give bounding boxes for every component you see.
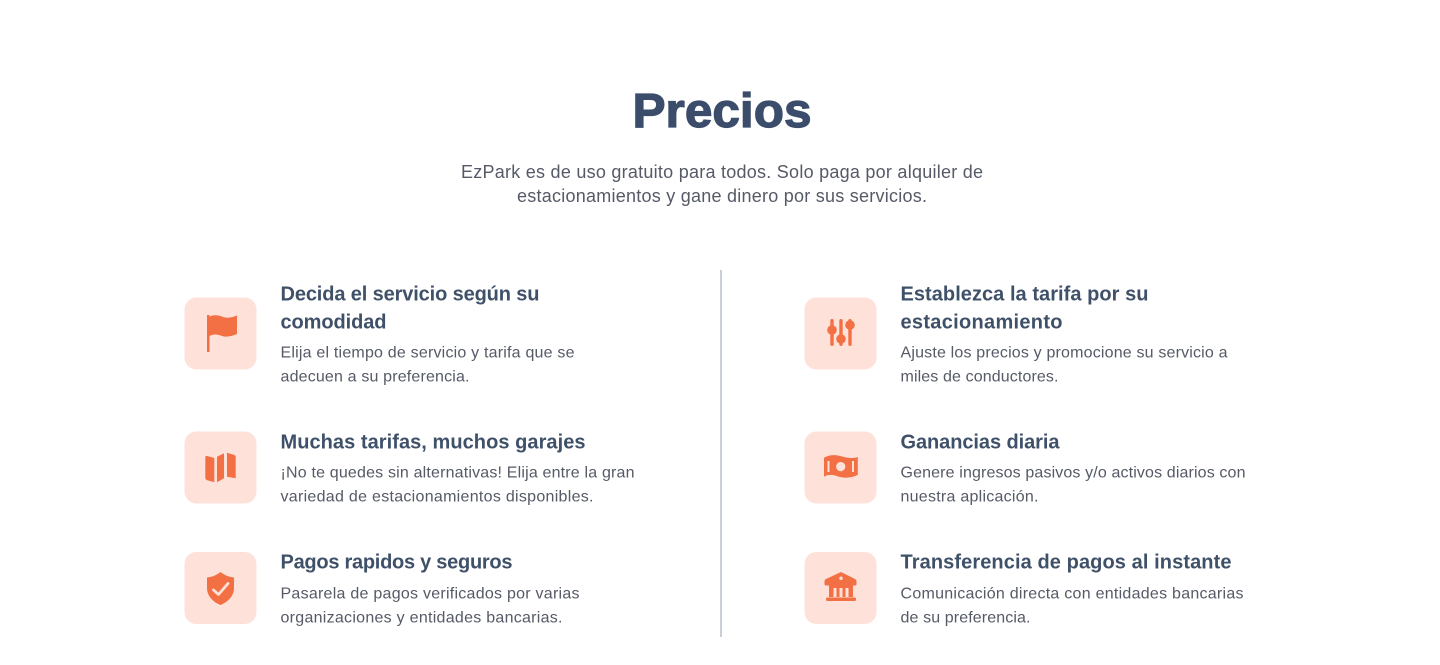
subtitle: EzPark es de uso gratuito para todos. Solo paga por alquiler de (461, 162, 983, 182)
subtitle: estacionamientos y gane dinero por sus servicios. (517, 186, 927, 206)
heading: comodidad (280, 312, 386, 334)
description: nuestra aplicación. (900, 488, 1038, 506)
description (900, 344, 1228, 386)
panel: establezca la tarifa (804, 284, 1228, 386)
description (280, 344, 575, 386)
panel: ganancias diaria (804, 432, 1246, 506)
icon: map (184, 432, 256, 504)
heading: Transferencia de pagos al instante (900, 552, 1232, 574)
heading (280, 284, 540, 334)
description: Pasarela de pagos verificados por varias (280, 586, 580, 602)
heading: Ganancias diaria (900, 432, 1060, 454)
description: Comunicación directa con entidades bancarias (900, 586, 1244, 602)
panel: decida el servicio (184, 284, 575, 386)
icon: bank (804, 552, 876, 624)
description: ¡No te quedes sin alternativas! Elija entre la gran (280, 464, 634, 482)
icon: banknote (804, 432, 876, 504)
icon: sliders (804, 298, 876, 370)
description (900, 464, 1246, 506)
description: miles de conductores. (900, 368, 1058, 386)
description: Genere ingresos pasivos y/o activos diarios con (900, 464, 1246, 482)
description (280, 464, 634, 506)
description: adecuen a su preferencia. (280, 368, 470, 386)
title: Precios (632, 85, 812, 138)
heading (900, 284, 1148, 334)
panel: transferencia de pagos (804, 552, 1244, 626)
panel: muchas tarifas (184, 432, 634, 506)
heading: estacionamiento (900, 312, 1062, 334)
heading: Decida el servicio según su (280, 284, 540, 306)
heading: Establezca la tarifa por su (900, 284, 1148, 306)
heading: Pagos rapidos y seguros (280, 552, 512, 574)
description (900, 586, 1244, 626)
icon: shield check (184, 552, 256, 624)
center divider (720, 270, 722, 637)
description: variedad de estacionamientos disponibles. (280, 488, 594, 506)
description: Ajuste los precios y promocione su servicio a (900, 344, 1228, 362)
description: organizaciones y entidades bancarias. (280, 610, 562, 626)
description (280, 586, 580, 626)
panel: pagos rapidos (184, 552, 580, 626)
description: Elija el tiempo de servicio y tarifa que se (280, 344, 575, 362)
heading: Muchas tarifas, muchos garajes (280, 432, 586, 454)
description: de su preferencia. (900, 610, 1030, 626)
subtitle (461, 162, 983, 206)
icon: flag (184, 298, 256, 370)
